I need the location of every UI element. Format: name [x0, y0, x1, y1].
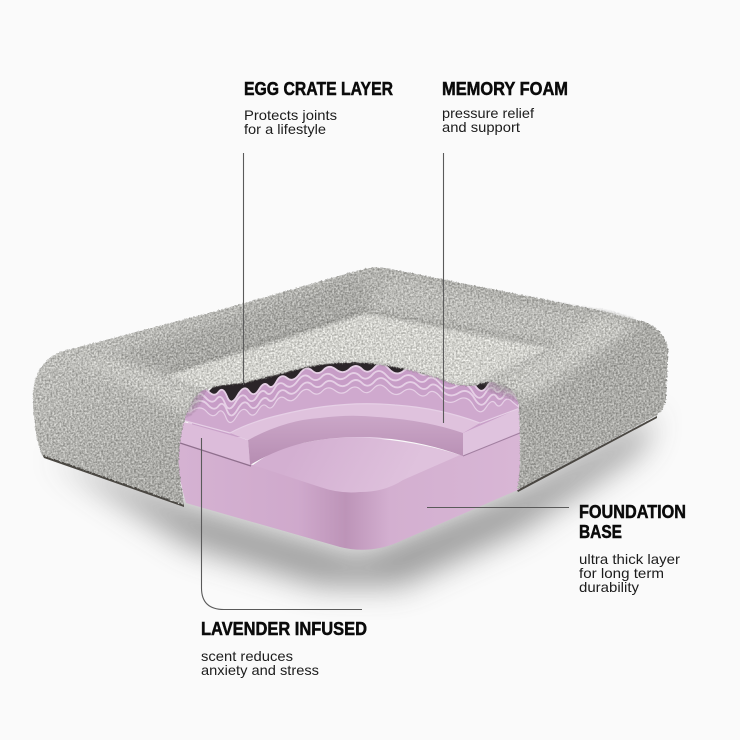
memory foam layer	[178, 404, 520, 466]
leader line: lavender infused	[202, 438, 362, 610]
label: foundation base: ultra thick layer	[579, 551, 680, 567]
leader line: egg crate layer	[242, 153, 244, 385]
back left bolster	[113, 276, 372, 375]
foundation base layer	[178, 432, 520, 550]
seam shadow along back right	[365, 311, 553, 346]
left bolster top	[60, 358, 203, 415]
dark cavity behind foam	[185, 358, 520, 425]
egg crate front row	[182, 385, 520, 433]
dark base strips	[42, 416, 657, 507]
label: foundation base: FOUNDATION	[579, 502, 686, 522]
floor shadow	[50, 415, 655, 585]
label: egg crate layer: for a lifestyle	[244, 121, 326, 137]
label: egg crate layer: EGG CRATE LAYER	[244, 79, 393, 99]
label: memory foam: and support	[442, 119, 520, 135]
bed floor	[163, 312, 553, 390]
label: lavender infused: LAVENDER INFUSED	[201, 619, 367, 639]
label: egg crate layer: Protects joints	[244, 107, 337, 123]
foam cutaway	[178, 358, 520, 550]
label: lavender infused: anxiety and stress	[201, 662, 319, 678]
egg crate back rows	[189, 364, 519, 438]
label: foundation base: BASE	[579, 522, 622, 542]
label: lavender infused: scent reduces	[201, 648, 293, 664]
label: foundation base	[579, 502, 686, 595]
label: memory foam	[442, 79, 568, 135]
label: lavender infused	[201, 619, 367, 678]
bouclé bed cover	[33, 268, 668, 505]
seam shadow along back left	[163, 311, 365, 374]
label: memory foam: pressure relief	[442, 105, 534, 121]
leader line: memory foam	[442, 153, 444, 423]
leader line: foundation base	[427, 506, 569, 508]
label: foundation base: for long term	[579, 565, 664, 581]
label: foundation base: durability	[579, 579, 639, 595]
label: egg crate layer	[244, 79, 393, 137]
right bolster top	[480, 313, 640, 400]
label: memory foam: MEMORY FOAM	[442, 79, 568, 99]
back right bolster	[368, 276, 597, 347]
